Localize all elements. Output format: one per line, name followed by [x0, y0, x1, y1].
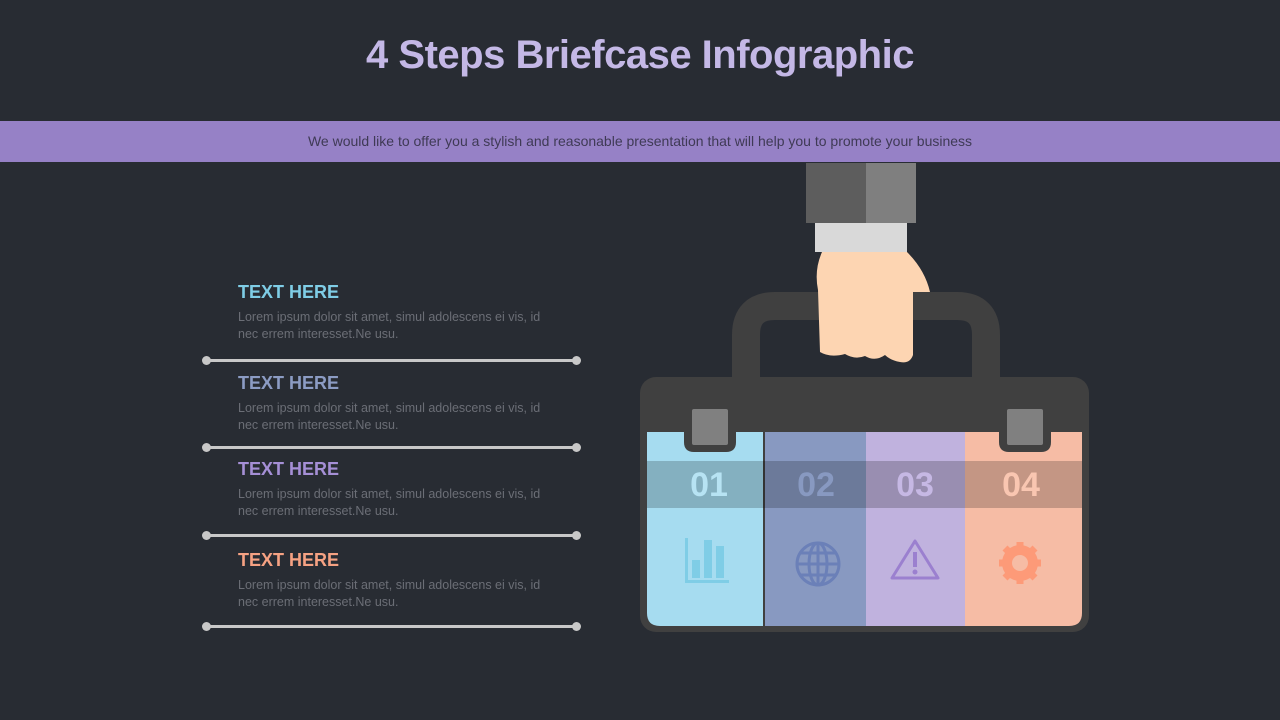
latches: [684, 408, 736, 452]
title: 4 Steps Briefcase Infographic: [366, 33, 914, 77]
numbers: 04: [1002, 466, 1040, 504]
item 2: nec errem interesset.Ne usu.: [238, 418, 398, 432]
hand: [817, 252, 930, 362]
handle: [746, 306, 986, 378]
subtitle band: We would like to offer you a stylish and reasonable presentation that will help you to promote your business: [308, 133, 972, 149]
item 3: nec errem interesset.Ne usu.: [238, 504, 398, 518]
icon: bar chart: [685, 538, 729, 583]
numbers: 03: [896, 466, 934, 504]
icon: warning: [892, 541, 938, 578]
numbers: 01: [690, 466, 728, 504]
item 1: nec errem interesset.Ne usu.: [238, 327, 398, 341]
icon: globe: [797, 543, 839, 585]
sleeve: [806, 163, 916, 252]
item 4: [238, 550, 540, 609]
panels: [647, 432, 1082, 626]
item 1: Lorem ipsum dolor sit amet, simul adolescens ei vis, id: [238, 310, 540, 324]
item 1: TEXT HERE: [238, 282, 339, 302]
item 4: TEXT HERE: [238, 550, 339, 570]
numbers: 02: [797, 466, 835, 504]
item 2: [238, 373, 540, 432]
item 3: Lorem ipsum dolor sit amet, simul adolescens ei vis, id: [238, 487, 540, 501]
icon: gear: [999, 542, 1041, 584]
item 1: [238, 282, 540, 341]
numbers: [690, 466, 1040, 504]
item 4: Lorem ipsum dolor sit amet, simul adolescens ei vis, id: [238, 578, 540, 592]
subtitle band: [0, 121, 1280, 162]
body: [640, 377, 1089, 632]
item 2: Lorem ipsum dolor sit amet, simul adolescens ei vis, id: [238, 401, 540, 415]
item 3: [238, 459, 540, 518]
item 3: TEXT HERE: [238, 459, 339, 479]
item 2: TEXT HERE: [238, 373, 339, 393]
item 4: nec errem interesset.Ne usu.: [238, 595, 398, 609]
